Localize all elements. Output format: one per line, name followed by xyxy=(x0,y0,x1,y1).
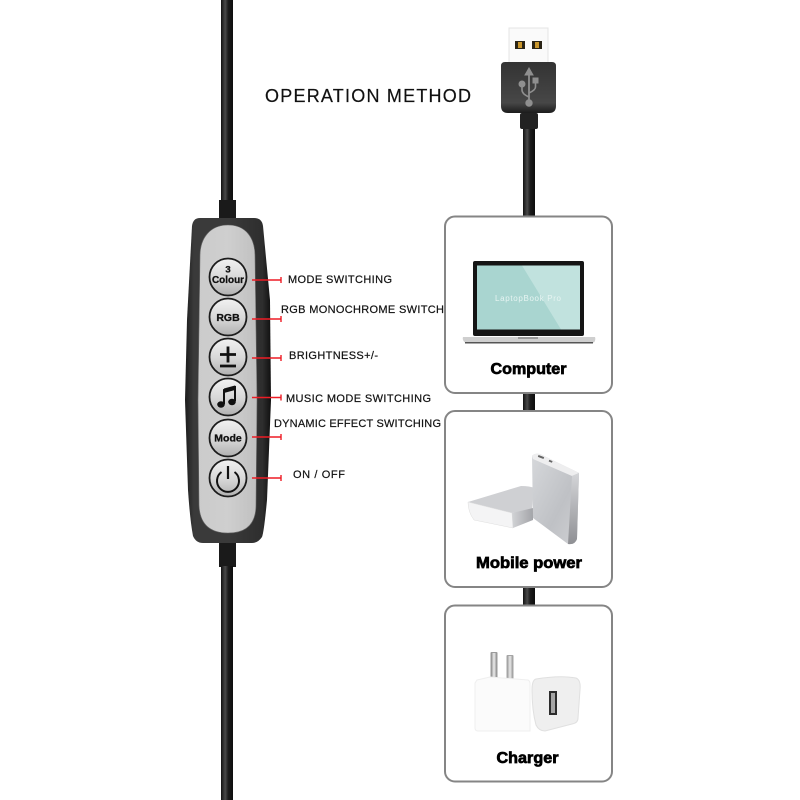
label: mobile power: Mobile power xyxy=(476,555,582,572)
label: charger: Charger xyxy=(496,750,558,767)
label: dynamic effect switching: DYNAMIC EFFECT SWITCHING xyxy=(274,418,441,430)
title: OPERATION METHOD xyxy=(265,86,471,106)
panel: charger xyxy=(445,606,612,782)
icon: power banks xyxy=(468,454,579,544)
label: rgb monochrome switch: RGB MONOCHROME SWITCH xyxy=(281,304,444,316)
button: 3 colour: Colour xyxy=(212,274,244,286)
left cable xyxy=(219,0,236,800)
label: music mode switching: MUSIC MODE SWITCHING xyxy=(286,393,431,405)
icon: charger xyxy=(475,652,580,731)
button: mode xyxy=(210,420,246,456)
silver face plate xyxy=(198,225,257,533)
button: RGB: RGB xyxy=(216,312,240,324)
label: computer: Computer xyxy=(490,361,566,378)
button: mode: Mode xyxy=(214,432,242,444)
button: 3 colour xyxy=(210,258,246,296)
button: plus minus xyxy=(210,338,246,376)
button: power xyxy=(210,460,246,496)
callout lines xyxy=(252,277,281,481)
label: on off: ON / OFF xyxy=(293,469,345,481)
panel: mobile power xyxy=(445,411,612,587)
button: RGB xyxy=(210,298,246,336)
icon: laptop: LaptopBook Pro xyxy=(495,294,562,303)
label: brightness: BRIGHTNESS+/- xyxy=(289,350,378,362)
icon: laptop xyxy=(463,261,595,344)
button: music xyxy=(210,378,246,416)
right cable xyxy=(523,128,535,628)
button: 3 colour: 3 xyxy=(225,264,231,276)
controller body xyxy=(185,218,271,543)
label: mode switching: MODE SWITCHING xyxy=(288,274,392,286)
usb plug xyxy=(501,28,556,129)
panel: computer xyxy=(445,216,612,393)
